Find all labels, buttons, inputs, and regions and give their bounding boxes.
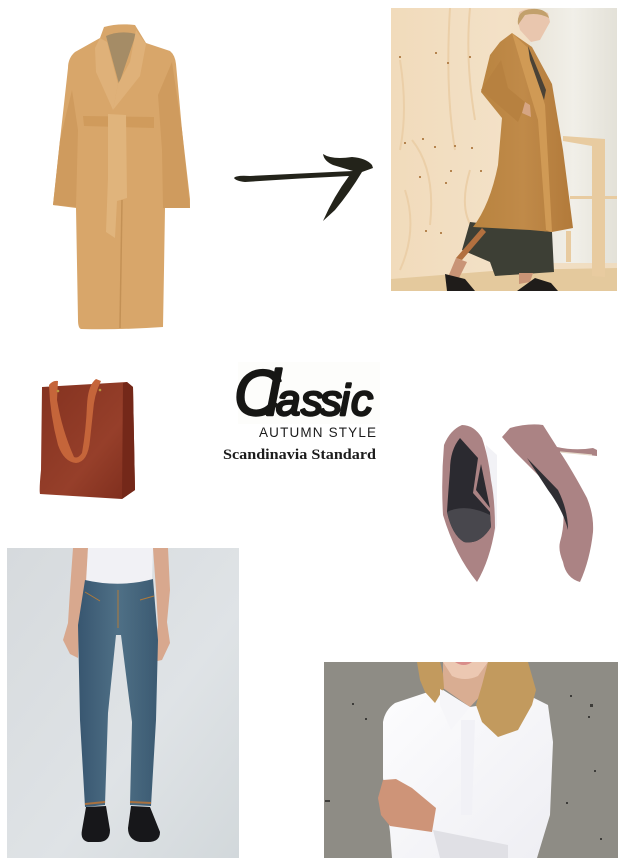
script headline: Cl xyxy=(234,357,282,429)
wood knots xyxy=(399,52,482,234)
neck xyxy=(443,662,488,707)
jeans photo xyxy=(7,548,239,858)
boots xyxy=(82,806,110,842)
curtain background xyxy=(530,8,617,263)
collar and placket xyxy=(440,689,470,707)
lookbook photo: model in camel coat xyxy=(391,8,617,291)
script headline: assic xyxy=(276,376,373,425)
subtitle: AUTUMN STYLE xyxy=(259,425,376,440)
soft shadow xyxy=(486,445,497,555)
hand-painted arrow xyxy=(234,154,373,221)
skirt xyxy=(462,222,554,276)
floor xyxy=(391,268,617,291)
hand xyxy=(378,779,436,832)
product photo: camel wrap coat xyxy=(53,24,190,329)
brand name: Scandinavia Standard xyxy=(223,447,377,463)
leather tote bag xyxy=(40,379,135,499)
cuff xyxy=(433,830,508,858)
shirt xyxy=(383,688,553,858)
arms xyxy=(63,548,88,658)
hair xyxy=(417,662,536,737)
jeans xyxy=(78,579,158,807)
right pump, side view xyxy=(502,424,597,582)
concrete speckles xyxy=(325,695,602,840)
bag strap xyxy=(49,379,101,463)
title block xyxy=(223,357,380,463)
white tee xyxy=(86,548,153,586)
leg and sandals xyxy=(448,258,467,278)
left pump, top view xyxy=(442,425,495,582)
wooden stool frame xyxy=(563,136,617,277)
model head xyxy=(518,9,550,42)
coat on model xyxy=(473,33,573,232)
suede heels xyxy=(442,424,597,582)
white shirt photo xyxy=(324,662,618,858)
